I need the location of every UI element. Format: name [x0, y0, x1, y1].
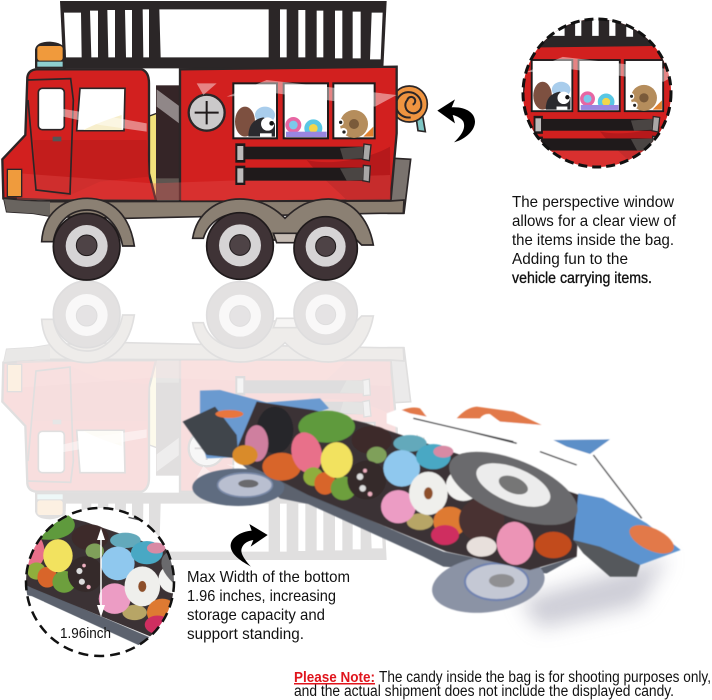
passenger windows with candy [233, 83, 375, 138]
measure label: 1.96inch [60, 625, 111, 642]
please note disclaimer [294, 669, 711, 700]
beacon light [35, 42, 66, 68]
please note disclaimer: Please Note: [294, 669, 375, 686]
candy pieces [232, 407, 572, 567]
gloss [60, 80, 397, 132]
please note disclaimer: and the actual shipment does not include the displayed candy. [294, 683, 674, 700]
bottom width description text: 1.96 inches, increasing [187, 588, 336, 605]
cab door outline [27, 79, 73, 194]
fold lines [413, 418, 642, 518]
white upper panel [387, 408, 647, 520]
width measure arrow [97, 528, 105, 617]
bag shadow [520, 555, 668, 628]
window description text: The perspective window [512, 194, 674, 211]
bag left end [183, 390, 329, 458]
curved arrow pointing to truck hose [437, 99, 475, 142]
back wheel of bag [428, 548, 548, 620]
body shading [33, 140, 149, 197]
clear window interior [233, 402, 580, 570]
dashed ring [523, 19, 671, 167]
cab body [2, 69, 156, 201]
wheels [53, 213, 357, 280]
window description text: Adding fun to the [512, 251, 628, 268]
chassis [4, 199, 404, 218]
exhaust pipe [388, 158, 411, 213]
door gap [148, 70, 180, 202]
enlarged windows [523, 19, 671, 167]
round vent plus [189, 95, 225, 131]
bottom width description text [187, 569, 350, 643]
window description text: allows for a clear view of [512, 213, 677, 230]
bottom width description text: support standing. [187, 626, 304, 643]
window description text: the items inside the bag. [512, 232, 674, 249]
ladder [60, 1, 387, 68]
curved arrow pointing to bag bottom [231, 524, 268, 567]
fire truck bag, side view [2, 1, 427, 280]
blue corner [553, 439, 610, 454]
fire truck reflection [2, 281, 427, 560]
bottom width description text: Max Width of the bottom [187, 569, 350, 586]
inset circle: window close-up [522, 18, 672, 168]
enlarged candy [26, 514, 174, 646]
rear body [180, 67, 397, 202]
orange roof fragments [402, 407, 542, 425]
bag lower strip [233, 457, 577, 573]
dashed ring [26, 508, 174, 656]
cab windows [38, 88, 125, 141]
fenders [42, 198, 373, 246]
bottom width description text: storage capacity and [187, 607, 325, 624]
side stripes [235, 143, 371, 185]
hose reel [391, 86, 427, 132]
large grey wheel [439, 436, 587, 540]
front wheel of bag [192, 469, 284, 506]
inset circle: bottom width close-up [24, 506, 264, 658]
headlight [7, 169, 22, 197]
window description text [512, 194, 677, 287]
bag lying on its side with candy [183, 390, 681, 620]
window description text: vehicle carrying items. [512, 270, 652, 287]
bag right end [573, 493, 681, 577]
